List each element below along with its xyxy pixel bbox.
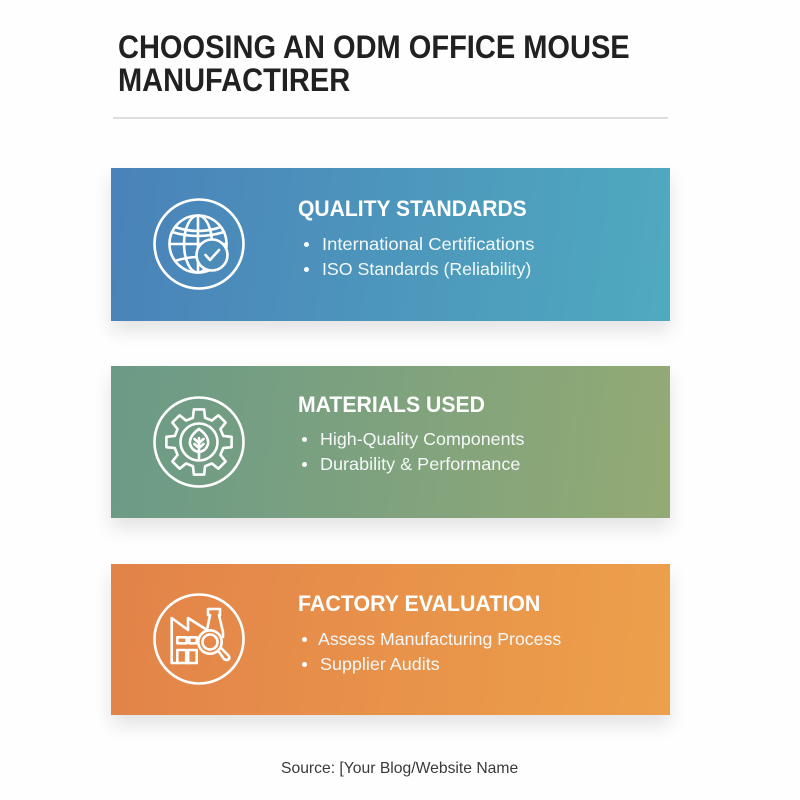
bullet list: materials used: Durability & Performance: [320, 454, 520, 474]
bullet list: quality standards: ISO Standards (Reliability): [322, 259, 531, 279]
bullet list: quality standards: [304, 234, 534, 279]
heading: factory evaluation: FACTORY EVALUATION: [298, 591, 540, 616]
bullet list: factory evaluation: Supplier Audits: [320, 654, 440, 674]
bullet list: quality standards: International Certifications: [322, 234, 534, 254]
bullet list: factory evaluation: Assess Manufacturing Process: [318, 629, 561, 649]
bullet list: factory evaluation: [302, 629, 561, 674]
panel: materials used: [111, 366, 670, 518]
icon: globe with check: [153, 198, 245, 290]
panel: quality standards: [111, 168, 670, 321]
icon: factory with magnifier: [153, 593, 245, 685]
panel: factory evaluation: [111, 564, 670, 715]
title: CHOOSING AN ODM OFFICE MOUSE: [118, 29, 630, 65]
title: MANUFACTIRER: [118, 62, 350, 98]
heading: materials used: MATERIALS USED: [298, 392, 485, 417]
source text: Source: [Your Blog/Website Name: [281, 760, 518, 777]
icon: gear with leaf: [153, 396, 245, 488]
bullet list: materials used: High-Quality Components: [320, 429, 524, 449]
title: [118, 29, 630, 98]
heading: quality standards: QUALITY STANDARDS: [298, 196, 527, 221]
bullet list: materials used: [302, 429, 524, 474]
